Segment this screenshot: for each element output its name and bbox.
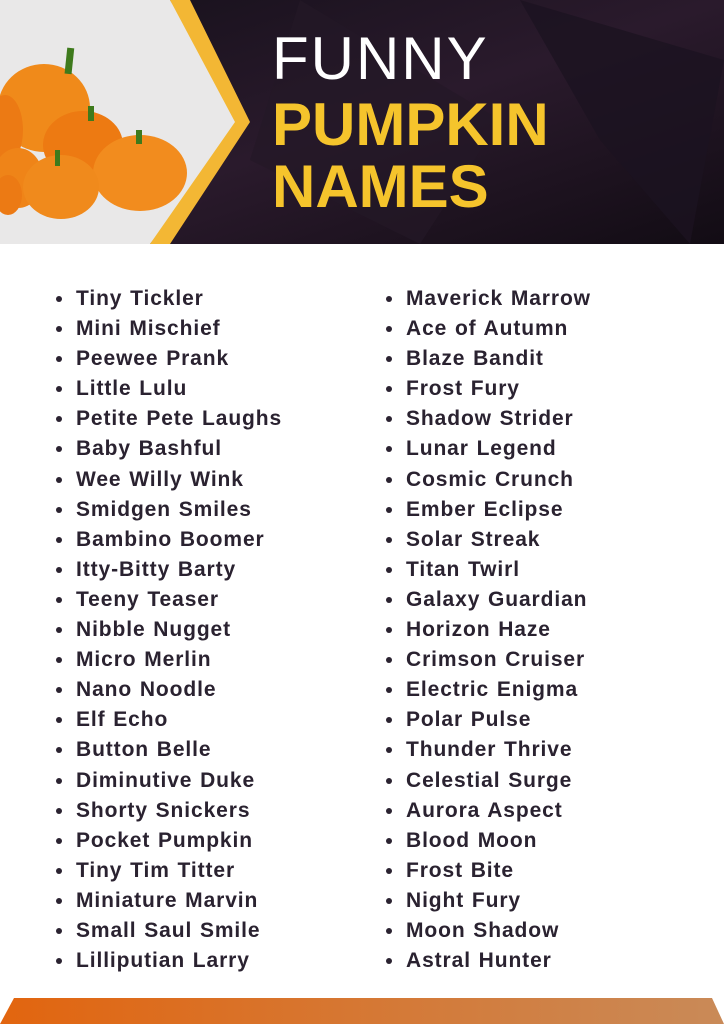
list: right column: Cosmic Crunch: [406, 468, 574, 491]
list: left column: Little Lulu: [76, 377, 187, 400]
list: left column: Nibble Nugget: [76, 618, 231, 641]
list: right column: Galaxy Guardian: [406, 588, 587, 611]
list: right column: Maverick Marrow: [406, 287, 591, 310]
list: left column: [56, 287, 282, 972]
title: [272, 25, 549, 220]
list: left column: Shorty Snickers: [76, 799, 250, 822]
list: right column: Frost Bite: [406, 859, 514, 882]
list: right column: Celestial Surge: [406, 768, 572, 792]
list: right column: Astral Hunter: [406, 949, 552, 972]
list: left column: Bambino Boomer: [76, 528, 265, 551]
list: right column: Ace of Autumn: [406, 317, 568, 340]
title: NAMES: [272, 153, 489, 220]
list: left column: Smidgen Smiles: [76, 498, 252, 521]
list: right column: Electric Enigma: [406, 678, 578, 701]
title: PUMPKIN: [272, 91, 549, 158]
list: left column: Teeny Teaser: [76, 588, 219, 611]
list: left column: Tiny Tim Titter: [76, 859, 235, 882]
list: right column: Solar Streak: [406, 528, 540, 551]
list: right column: Blood Moon: [406, 829, 537, 852]
list: left column: Tiny Tickler: [76, 287, 204, 310]
list: right column: Aurora Aspect: [406, 799, 563, 822]
list: left column: Small Saul Smile: [76, 919, 260, 942]
list: right column: Lunar Legend: [406, 437, 557, 460]
list: left column: Peewee Prank: [76, 347, 229, 370]
list: left column: Pocket Pumpkin: [76, 829, 253, 852]
list: right column: Moon Shadow: [406, 919, 559, 942]
title: FUNNY: [272, 25, 489, 92]
list: right column: Shadow Strider: [406, 407, 574, 430]
pumpkins: [0, 48, 187, 219]
list: left column: Wee Willy Wink: [76, 468, 244, 491]
list: left column: Miniature Marvin: [76, 889, 258, 912]
list: right column: Titan Twirl: [406, 558, 520, 581]
list: left column: Button Belle: [76, 738, 211, 761]
list: left column: Lilliputian Larry: [76, 949, 250, 972]
list: right column: Frost Fury: [406, 377, 520, 400]
list: left column: Itty-Bitty Barty: [76, 558, 236, 581]
list: left column: Diminutive Duke: [76, 768, 255, 792]
list: right column: Blaze Bandit: [406, 347, 544, 370]
list: right column: [386, 287, 591, 972]
list: left column: Micro Merlin: [76, 648, 211, 671]
light photo area: [0, 0, 245, 244]
footer bar: [0, 998, 724, 1024]
list: left column: Nano Noodle: [76, 678, 216, 701]
list: left column: Elf Echo: [76, 708, 168, 731]
list: right column: Night Fury: [406, 889, 521, 912]
list: left column: Baby Bashful: [76, 437, 222, 460]
yellow chevron: [150, 0, 250, 244]
list: right column: Thunder Thrive: [406, 738, 572, 761]
list: right column: Ember Eclipse: [406, 498, 563, 521]
header banner: [0, 0, 724, 244]
list: left column: Mini Mischief: [76, 317, 221, 340]
list: right column: Crimson Cruiser: [406, 648, 585, 671]
list: right column: Polar Pulse: [406, 708, 531, 731]
list: left column: Petite Pete Laughs: [76, 407, 282, 430]
list: right column: Horizon Haze: [406, 618, 551, 641]
